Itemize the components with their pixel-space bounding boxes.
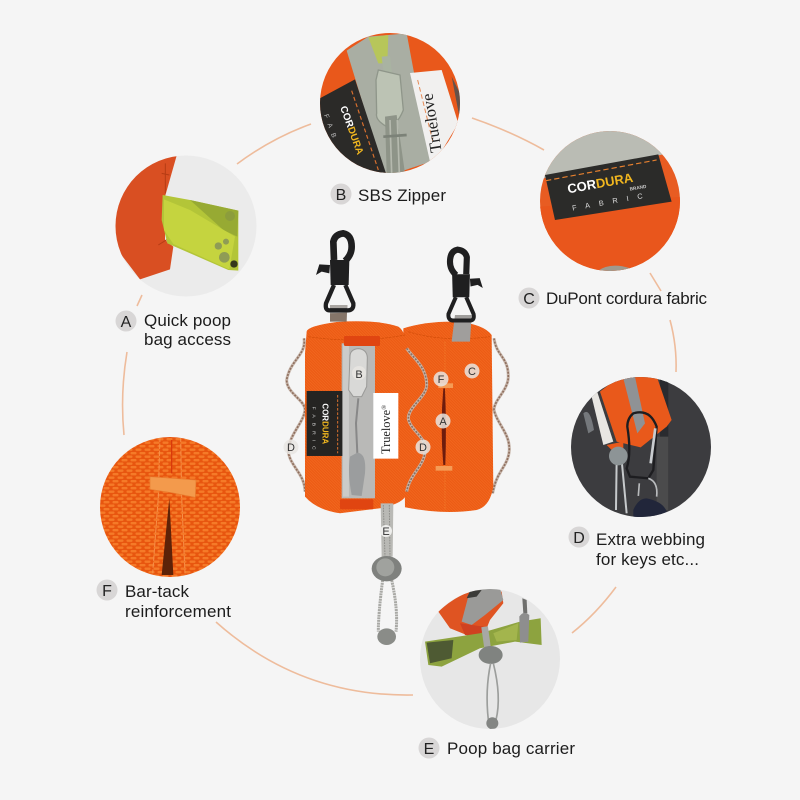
- pouch: [600, 376, 672, 447]
- marker D right: D: [419, 442, 427, 454]
- central product: pouch with clips: ®: [381, 405, 388, 410]
- bag roll: [162, 195, 238, 271]
- webbing between pouches: [407, 348, 427, 492]
- label A: quick poop bag access: A: [121, 314, 132, 331]
- bottom cord with toggle: [372, 503, 402, 645]
- pouch side: [116, 156, 176, 280]
- marker A: [436, 414, 450, 428]
- label F: bar-tack reinforcement: reinforcement: [125, 602, 231, 621]
- photo circle C: cordura fabric: CORDURA: [566, 170, 635, 196]
- toggle: [479, 646, 503, 664]
- marker D left: [284, 440, 298, 454]
- photo circle F: bar-tack reinforcement: [99, 436, 241, 578]
- label E: poop bag carrier: Poop bag carrier: [447, 739, 575, 758]
- marker D left: D: [287, 442, 295, 454]
- webbing right: [493, 338, 509, 493]
- marker D right: [416, 440, 430, 454]
- label F: bar-tack reinforcement: Bar-tack: [125, 582, 190, 601]
- photo circle C: cordura fabric: [537, 130, 683, 277]
- cordura label: [307, 391, 342, 456]
- left clip: [316, 233, 353, 310]
- right clip: [448, 250, 483, 321]
- right pouch body: [403, 322, 493, 512]
- grey tape: [544, 131, 662, 178]
- fabric weave shade: [540, 197, 683, 273]
- pouch: [438, 590, 503, 637]
- left pouch body: [305, 321, 407, 513]
- label B: SBS zipper: [330, 184, 446, 205]
- label E: poop bag carrier: E: [424, 741, 434, 758]
- toggle and cord: [616, 460, 627, 513]
- webbing left: [287, 338, 305, 492]
- photo circle B: zipper: Truelove: [418, 92, 446, 154]
- label: [545, 154, 672, 220]
- label D: extra webbing: [568, 526, 705, 569]
- central product: pouch with clips: [287, 233, 509, 513]
- straps: [330, 305, 347, 322]
- loop: [487, 663, 498, 720]
- label C: DuPont cordura fabric: C: [523, 291, 535, 308]
- label D: extra webbing: Extra webbing: [596, 530, 705, 549]
- photo circle A: quick poop bag access: [110, 153, 257, 297]
- photo circle E: poop bag carrier: [419, 588, 561, 730]
- truelove label: [373, 393, 398, 459]
- central product: pouch with clips: COR DURA: [321, 403, 330, 444]
- label B: SBS zipper: B: [336, 187, 346, 204]
- white label: [410, 70, 458, 162]
- connecting arcs: [123, 118, 676, 695]
- marker C: [464, 364, 480, 378]
- zipper slider and pull: [349, 349, 367, 397]
- carabiner: [627, 412, 657, 478]
- label A: quick poop bag access: Quick poop: [144, 311, 231, 330]
- label D: extra webbing: D: [573, 530, 585, 547]
- bag: [425, 618, 542, 667]
- marker A: A: [439, 416, 447, 428]
- zipper panel: [342, 343, 375, 498]
- label A: quick poop bag access: bag access: [144, 330, 231, 349]
- zipper slider: [382, 56, 388, 64]
- hanging pull: [522, 598, 527, 613]
- seam and slit: [444, 342, 446, 510]
- marker B: [352, 366, 366, 381]
- central product: pouch with clips: Truelove: [379, 410, 393, 454]
- photo circle B: zipper: CORDURA: [337, 105, 365, 156]
- photo circle C: cordura fabric: FABRIC: [571, 190, 652, 213]
- label C: DuPont cordura fabric: DuPont cordura fabric: [546, 289, 708, 308]
- label F: bar-tack reinforcement: [96, 580, 231, 621]
- marker B: B: [355, 369, 363, 381]
- zipper tape: [347, 33, 431, 177]
- marker F: F: [438, 374, 445, 386]
- label A: quick poop bag access: [116, 310, 231, 349]
- marker E: E: [382, 526, 390, 538]
- label F: bar-tack reinforcement: F: [102, 583, 112, 600]
- marker C: C: [468, 366, 476, 378]
- cordura label: [320, 79, 386, 173]
- photo circle B: zipper: FAB: [322, 113, 339, 144]
- strap: [481, 626, 491, 647]
- key ring: [638, 478, 657, 497]
- label D: extra webbing: for keys etc...: [596, 550, 699, 569]
- marker F: [434, 372, 448, 386]
- small markers on product: [284, 364, 480, 538]
- photo circle C: cordura fabric: BRAND: [629, 184, 647, 192]
- label B: SBS zipper: SBS Zipper: [358, 186, 446, 205]
- photo circle B: zipper: [317, 32, 462, 180]
- marker E: [380, 525, 392, 538]
- photo circle D: extra webbing for keys: [570, 370, 712, 520]
- central product: pouch with clips: FABRIC: [311, 407, 317, 455]
